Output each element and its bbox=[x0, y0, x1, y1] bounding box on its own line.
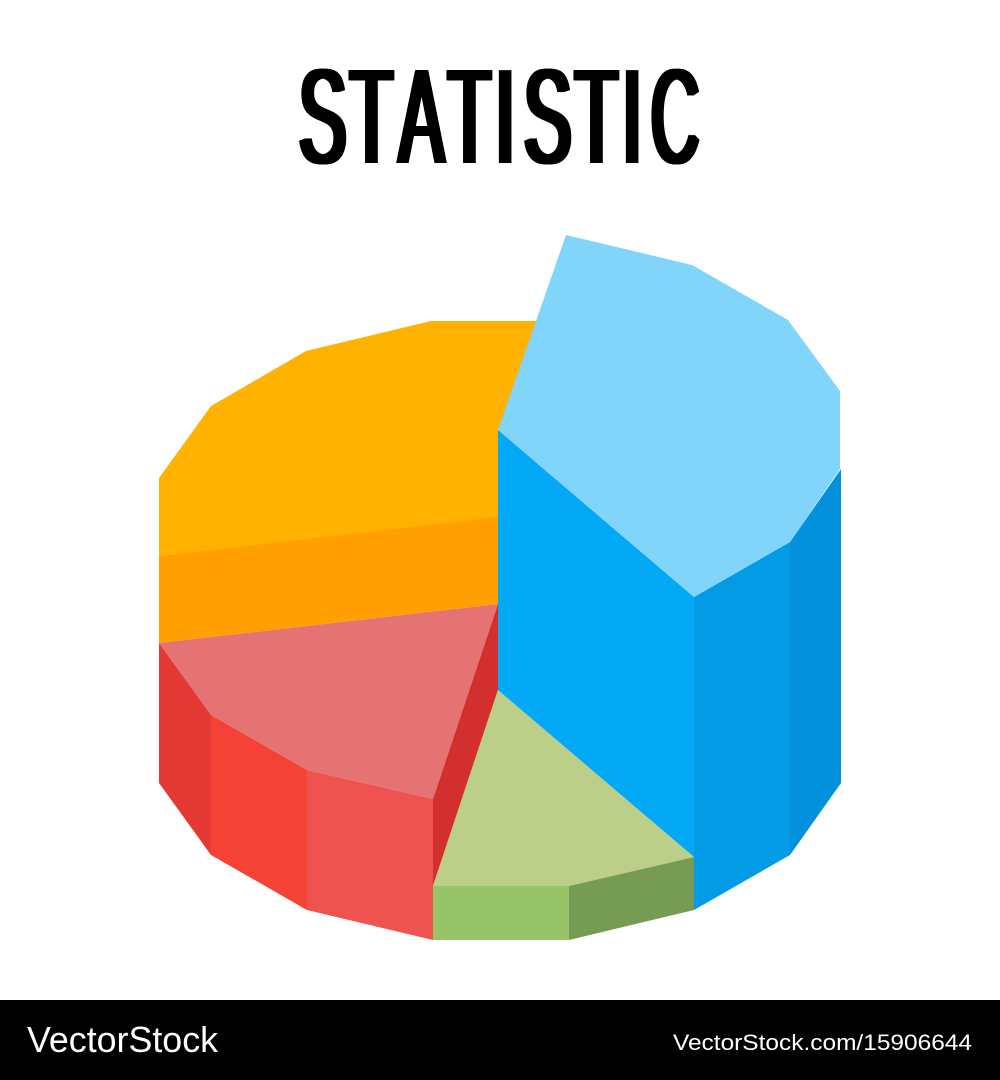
title bbox=[299, 41, 700, 192]
title: I bbox=[613, 41, 651, 192]
title: C bbox=[651, 41, 699, 192]
green slice bbox=[433, 690, 694, 940]
title: A bbox=[399, 41, 444, 192]
watermark logo text: VectorStock bbox=[27, 1019, 219, 1060]
title: S bbox=[524, 41, 571, 192]
title: I bbox=[486, 41, 524, 192]
title: S bbox=[299, 41, 346, 192]
watermark url text: VectorStock.com/15906644 bbox=[673, 1030, 972, 1055]
title: T bbox=[448, 41, 490, 192]
title: T bbox=[575, 41, 617, 192]
red slice bbox=[159, 604, 498, 940]
title: T bbox=[350, 41, 392, 192]
orange slice bbox=[159, 321, 540, 643]
watermark bar bbox=[0, 1000, 1000, 1080]
blue slice bbox=[498, 235, 841, 910]
